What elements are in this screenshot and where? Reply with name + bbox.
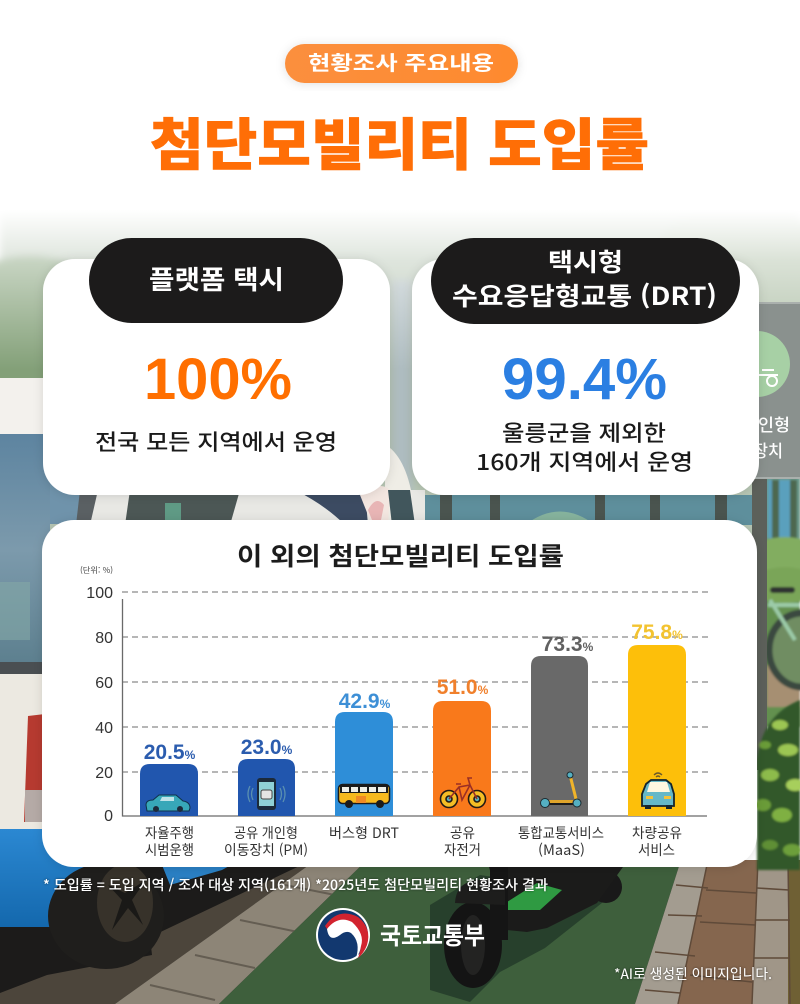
y axis labels bbox=[86, 585, 113, 825]
icon: shared car bbox=[642, 773, 674, 809]
logo: ministry emblem bbox=[316, 908, 370, 962]
scooter bbox=[430, 860, 628, 1002]
bar: autonomous driving pilot 20.5%: 20.5% bbox=[144, 741, 196, 764]
bar: autonomous driving pilot 20.5% bbox=[140, 741, 198, 816]
wheel bbox=[48, 863, 164, 969]
category labels: 공유 bbox=[450, 823, 475, 843]
bar: integrated mobility service 73.3%: 73.3% bbox=[542, 633, 594, 656]
footnote: * 도입률 = 도입 지역 / 조사 대상 지역(161개) *2025년도 첨단모빌리티 현황조사 결과 bbox=[43, 875, 548, 895]
ministry name: 국토교통부 bbox=[380, 916, 485, 951]
description: 전국 모든 지역에서 운영 bbox=[95, 425, 337, 457]
heading pill: platform taxi: 플랫폼 택시 bbox=[149, 260, 284, 297]
icon: car bbox=[146, 795, 190, 812]
bar: shared bicycle 51.0% bbox=[433, 676, 491, 816]
sign post: 개인형 bbox=[742, 411, 790, 436]
header pill bbox=[285, 44, 518, 83]
bar: bus DRT 42.9% bbox=[335, 690, 393, 816]
heading pill: taxi DRT: 수요응답형교통 (DRT) bbox=[452, 277, 717, 313]
icon: bus bbox=[338, 784, 390, 808]
bar: integrated mobility service 73.3% bbox=[531, 633, 594, 816]
category labels: 통합교통서비스 bbox=[518, 823, 604, 843]
vehicle between cards bbox=[76, 439, 760, 525]
description: 160개 지역에서 운영 bbox=[476, 445, 693, 477]
bar: shared bicycle 51.0%: 51.0% bbox=[437, 676, 489, 699]
panel: other mobility adoption chart bbox=[42, 520, 757, 867]
heading pill: taxi DRT bbox=[431, 238, 740, 324]
sign post bbox=[724, 303, 800, 770]
description bbox=[476, 416, 693, 477]
title: 첨단모빌리티 도입률 bbox=[150, 101, 649, 182]
category labels: 차량공유 bbox=[632, 823, 682, 843]
category labels: 시범운행 bbox=[145, 840, 194, 860]
stat: 99.4%: 99.4% bbox=[502, 347, 667, 412]
icon: bicycle bbox=[440, 778, 486, 808]
category labels: 이동장치 (PM) bbox=[224, 840, 308, 860]
right greenery bbox=[751, 477, 800, 727]
y axis labels: 40 bbox=[95, 720, 113, 737]
bar: car sharing 75.8%: 75.8% bbox=[631, 621, 683, 644]
category labels: 자율주행 bbox=[145, 823, 194, 843]
category labels: 자전거 bbox=[444, 840, 481, 860]
bar: shared personal mobility 23.0%: 23.0% bbox=[241, 736, 293, 759]
category labels bbox=[145, 823, 682, 860]
icon: phone bbox=[248, 778, 285, 810]
right bush bbox=[755, 700, 800, 870]
unit note: (단위: %) bbox=[80, 565, 113, 576]
y axis labels: 0 bbox=[104, 808, 113, 825]
bar: bus DRT 42.9%: 42.9% bbox=[339, 690, 391, 713]
category labels: (MaaS) bbox=[538, 840, 585, 860]
road surfaces bbox=[0, 860, 800, 1004]
panel: platform taxi bbox=[43, 238, 390, 495]
bar: car sharing 75.8% bbox=[628, 621, 686, 816]
y axis labels: 80 bbox=[95, 630, 113, 647]
description: 울릉군을 제외한 bbox=[502, 416, 666, 448]
sign post: 장치 bbox=[753, 437, 783, 462]
y axis labels: 100 bbox=[86, 585, 113, 602]
chart heading: 이 외의 첨단모빌리티 도입률 bbox=[237, 537, 564, 573]
stat: 100%: 100% bbox=[144, 347, 292, 412]
y axis labels: 60 bbox=[95, 675, 113, 692]
heading pill: taxi DRT: 택시형 bbox=[548, 243, 623, 279]
category labels: 버스형 DRT bbox=[329, 823, 399, 843]
bar: shared personal mobility 23.0% bbox=[238, 736, 295, 816]
y axis labels: 20 bbox=[95, 765, 113, 782]
category labels: 서비스 bbox=[638, 840, 675, 860]
panel: taxi DRT bbox=[412, 238, 759, 495]
AI image note: *AI로 생성된 이미지입니다. bbox=[614, 964, 772, 984]
heading pill: platform taxi bbox=[89, 238, 343, 323]
category labels: 공유 개인형 bbox=[234, 823, 298, 843]
header pill: 현황조사 주요내용 bbox=[308, 47, 494, 76]
van bbox=[0, 378, 240, 969]
icon: kick scooter bbox=[540, 772, 581, 808]
